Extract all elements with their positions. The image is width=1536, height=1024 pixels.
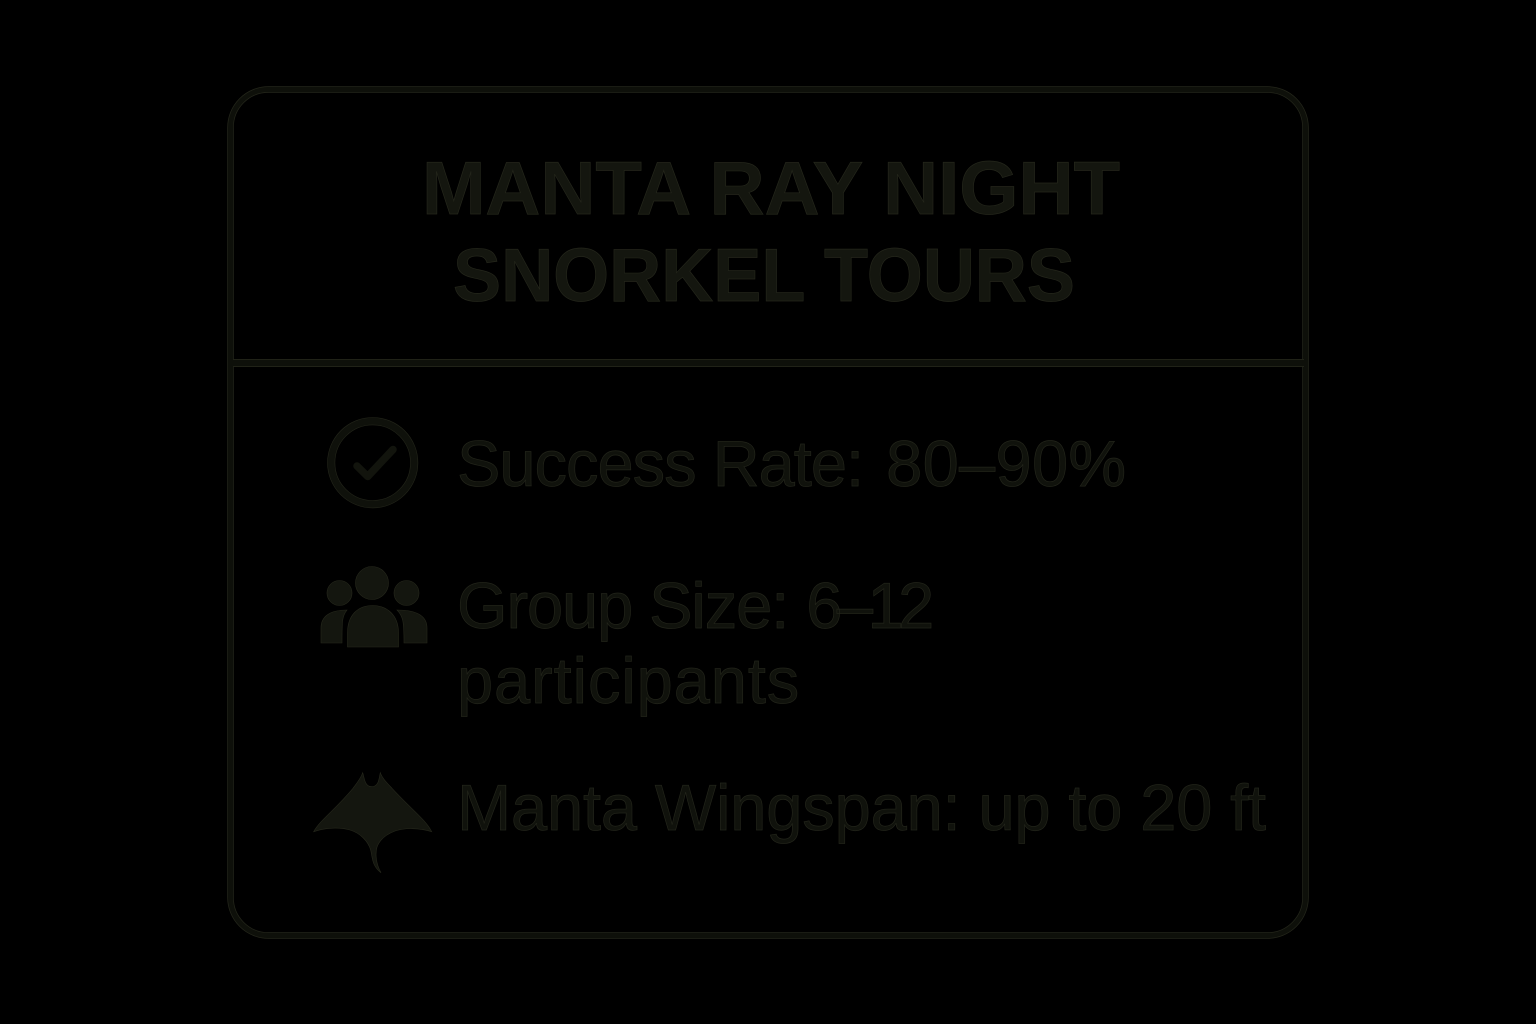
stat: group size: Group Size: 6–12	[457, 569, 931, 642]
title: MANTA RAY NIGHT	[422, 146, 1120, 230]
panel: card outline	[230, 90, 1306, 936]
title: SNORKEL TOURS	[453, 233, 1075, 317]
stat: success rate: Success Rate: 80–90%	[457, 427, 1126, 500]
icon: manta ray	[314, 773, 432, 873]
icon: check mark in circle	[331, 421, 414, 504]
header divider	[233, 359, 1304, 367]
title	[422, 146, 1120, 317]
stat: group size: participants	[457, 644, 800, 717]
stat: group size	[457, 569, 931, 717]
stat: manta wingspan: Manta Wingspan: up to 20 ft	[457, 771, 1266, 844]
icon: group of people	[321, 566, 427, 647]
